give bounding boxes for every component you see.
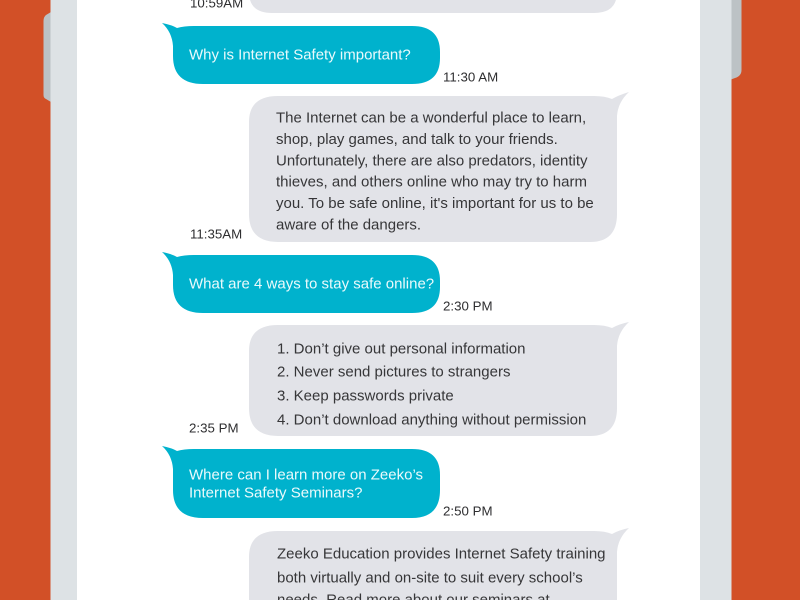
message: where can I learn more: Internet Safety Seminars? <box>189 485 362 502</box>
message: why safety matters: you. To be safe online, it's important for us to be <box>276 195 594 212</box>
timestamp 11:30 AM: 11:30 AM <box>443 70 498 85</box>
message: where can I learn more: Where can I learn more on Zeeko’s <box>189 467 423 484</box>
timestamp 2:30 PM: 2:30 PM <box>443 299 493 314</box>
message: what are 4 ways <box>162 252 440 313</box>
message: four ways list: 2. Never send pictures to strangers <box>277 364 510 381</box>
timestamp 2:35 PM: 2:35 PM <box>189 421 239 436</box>
button: left side <box>44 12 51 102</box>
message: four ways list <box>249 322 629 436</box>
message: four ways list: 3. Keep passwords private <box>277 388 454 405</box>
message: top grey bubble <box>249 0 617 13</box>
message: zeeko education answer <box>249 528 629 600</box>
message: why is internet safety important <box>162 23 440 84</box>
message: why safety matters: shop, play games, and talk to your friends. <box>276 131 558 148</box>
message: why safety matters: aware of the dangers. <box>276 217 421 234</box>
phone screen <box>77 0 700 600</box>
message: where can I learn more <box>162 446 440 518</box>
message: why is internet safety important: Why is Internet Safety important? <box>189 47 411 64</box>
message: four ways list: 1. Don’t give out personal information <box>277 341 525 358</box>
timestamp 11:35AM: 11:35AM <box>190 227 242 242</box>
message: why safety matters: Unfortunately, there are also predators, identity <box>276 153 588 170</box>
message: four ways list: 4. Don’t download anything without permission <box>277 412 586 429</box>
button: right side <box>731 0 742 80</box>
timestamp 2:50 PM: 2:50 PM <box>443 504 493 519</box>
message: what are 4 ways: What are 4 ways to stay safe online? <box>189 276 434 293</box>
message: zeeko education answer: Zeeko Education provides Internet Safety training <box>277 546 606 563</box>
message: why safety matters <box>249 92 629 242</box>
message: why safety matters: thieves, and others online who may try to harm <box>276 174 587 191</box>
message: why safety matters: The Internet can be a wonderful place to learn, <box>276 110 586 127</box>
message: zeeko education answer: both virtually and on-site to suit every school’s <box>277 570 583 587</box>
